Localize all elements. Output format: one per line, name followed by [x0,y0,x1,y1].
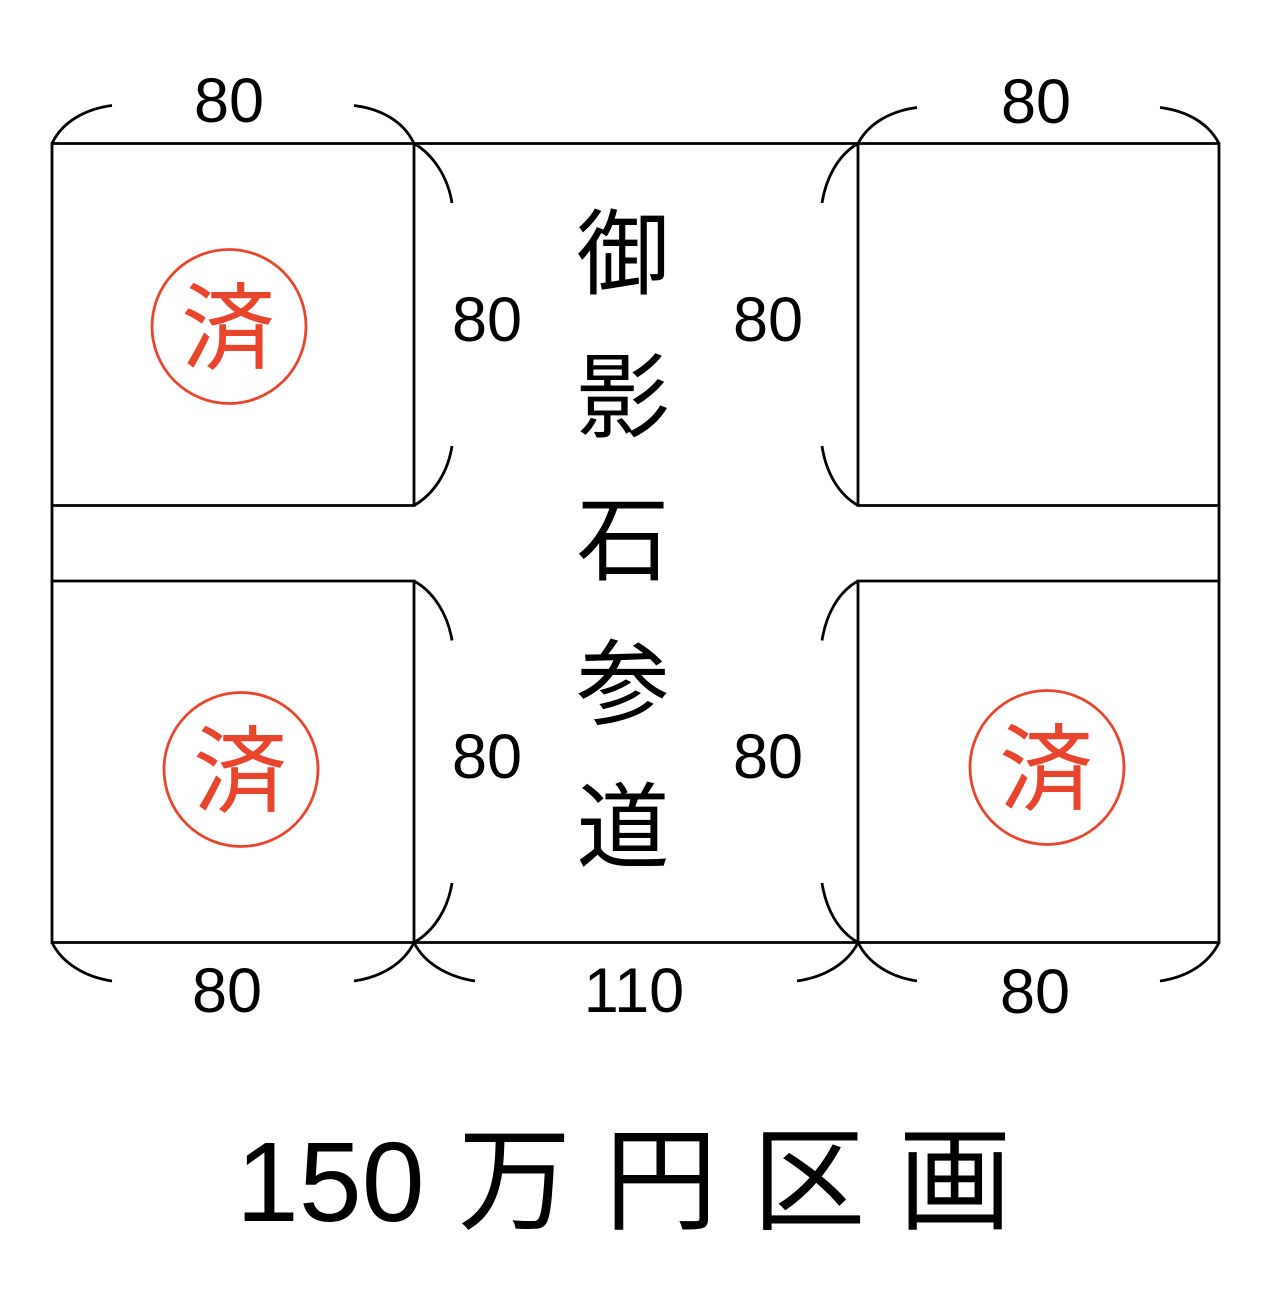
vertical road label [576,203,670,880]
dimension labels: 80 [1001,67,1071,137]
dimension labels: 80 [733,722,803,792]
sold stamp: top left [152,250,306,404]
vertical road label: 御 [576,203,670,307]
dimension labels: 80 [1000,957,1070,1027]
dimension labels: 80 [192,956,262,1026]
dimension brackets [52,106,1219,981]
sold stamp: bottom right: 済 [999,717,1093,822]
dimension labels: 80 [452,285,522,355]
vertical road label: 影 [576,346,670,450]
price caption: 万 [458,1118,571,1244]
vertical road label: 石 [576,489,670,593]
price caption [236,1118,1012,1245]
price caption: 円 [604,1118,718,1244]
sold stamp: bottom left: 済 [193,719,287,824]
dimension labels [192,66,1071,1027]
plot outlines [52,144,1219,942]
sold stamp: bottom right [970,690,1124,844]
dimension labels: 80 [452,722,522,792]
dimension labels: 80 [733,285,803,355]
price caption: 150 [236,1119,425,1245]
sold stamp: top left: 済 [181,276,275,381]
dimension labels: 110 [584,956,684,1026]
price caption: 画 [898,1118,1012,1244]
vertical road label: 参 [576,633,670,737]
sold stamp: bottom left [164,692,318,846]
vertical road label: 道 [576,776,670,880]
dimension labels: 80 [194,66,264,136]
price caption: 区 [752,1118,866,1244]
